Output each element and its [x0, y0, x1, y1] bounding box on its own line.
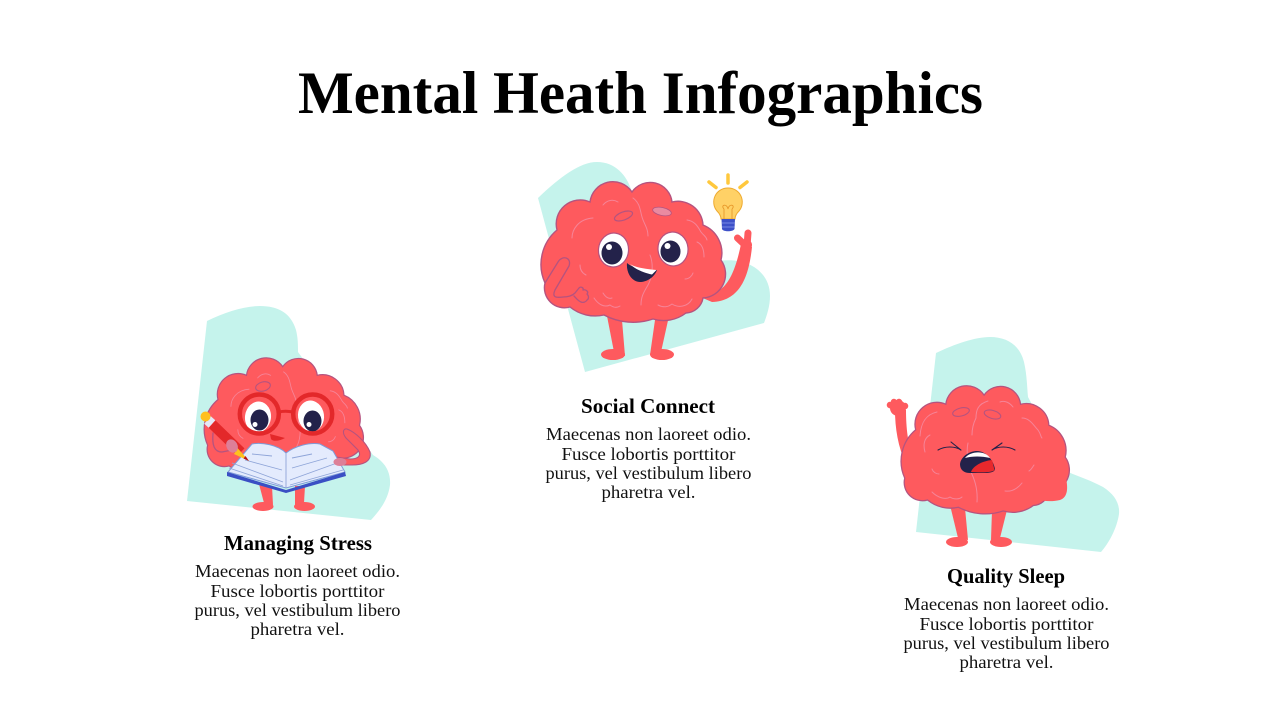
icon: light bulb	[709, 175, 747, 231]
brain character: thinking with light bulb	[541, 175, 752, 360]
mouth	[270, 434, 285, 441]
eyes	[243, 399, 326, 434]
brain body	[901, 386, 1069, 514]
yawning mouth	[960, 451, 995, 473]
teal blob background	[916, 337, 1119, 552]
panel: managing stress	[187, 306, 401, 639]
right arm	[336, 429, 370, 465]
body text: Maecenas non laoreet odio.	[546, 424, 751, 444]
eyes	[597, 231, 690, 268]
body text: Maecenas non laoreet odio.	[195, 561, 400, 581]
smiling mouth	[627, 263, 657, 282]
resting hand	[1036, 478, 1067, 501]
brain character: yawning	[890, 386, 1069, 547]
teal blob background	[187, 306, 390, 520]
brain spots	[952, 406, 1002, 421]
body text: purus, vel vestibulum libero	[904, 633, 1110, 653]
pink hands	[224, 437, 346, 466]
body text	[194, 561, 401, 639]
heading: Quality Sleep	[947, 564, 1065, 588]
body text: purus, vel vestibulum libero	[194, 600, 401, 620]
closed eyes	[938, 442, 1015, 450]
brain body	[204, 358, 363, 479]
body text: pharetra vel.	[250, 619, 344, 639]
heading: Managing Stress	[224, 531, 372, 555]
brain body	[541, 182, 726, 322]
body text: Maecenas non laoreet odio.	[904, 594, 1109, 614]
brain spots	[613, 206, 672, 223]
legs	[252, 484, 315, 511]
body text	[904, 594, 1110, 672]
heading: Social Connect	[581, 394, 715, 418]
brain spot	[255, 380, 271, 393]
body text	[546, 424, 752, 502]
panel: quality sleep	[890, 337, 1119, 672]
title: Mental Heath Infographics	[298, 60, 983, 126]
body text: purus, vel vestibulum libero	[546, 463, 752, 483]
left arm outline	[213, 433, 232, 452]
raised arm	[698, 233, 752, 302]
body text: pharetra vel.	[960, 652, 1054, 672]
legs	[601, 316, 674, 360]
red glasses	[240, 394, 332, 434]
raised arm	[890, 400, 913, 464]
legs	[946, 505, 1012, 547]
open book	[227, 443, 346, 493]
resting arm outline	[545, 258, 588, 302]
body text: pharetra vel.	[602, 482, 696, 502]
body text: Fusce lobortis porttitor	[920, 614, 1094, 634]
body text: Fusce lobortis porttitor	[562, 444, 736, 464]
brain wrinkles	[920, 401, 1042, 502]
brain wrinkles	[572, 198, 707, 307]
teal blob background	[538, 162, 770, 372]
pencil	[200, 412, 249, 461]
brain character: reading with pencil	[200, 358, 370, 511]
body text: Fusce lobortis porttitor	[210, 581, 385, 601]
panel: social connect	[538, 162, 770, 502]
